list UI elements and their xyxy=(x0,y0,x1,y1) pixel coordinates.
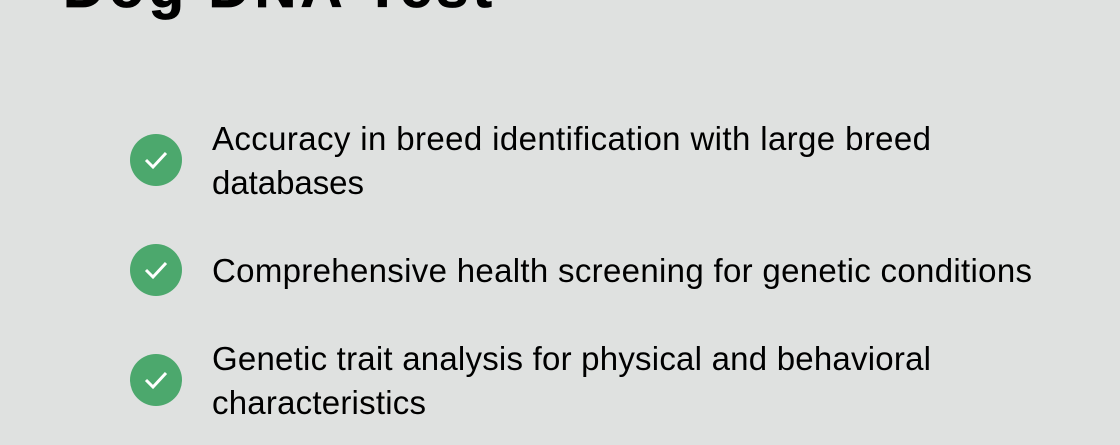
text: trait analysis: characteristics xyxy=(212,384,426,421)
icon: green check circle xyxy=(130,244,182,296)
icon: green check circle xyxy=(130,354,182,406)
list item: trait analysis xyxy=(130,340,931,421)
list item: breed identification xyxy=(130,120,931,201)
text: trait analysis xyxy=(212,340,931,421)
text: health screening: Comprehensive health screening for genetic conditions xyxy=(212,252,1032,289)
icon: green check circle xyxy=(130,134,182,186)
text: breed identification: Accuracy in breed identification with large breed xyxy=(212,120,931,157)
text: trait analysis: Genetic trait analysis for physical and behavioral xyxy=(212,340,931,377)
text: breed identification xyxy=(212,120,931,201)
text: breed identification: databases xyxy=(212,164,364,201)
list item: health screening xyxy=(130,244,1032,296)
